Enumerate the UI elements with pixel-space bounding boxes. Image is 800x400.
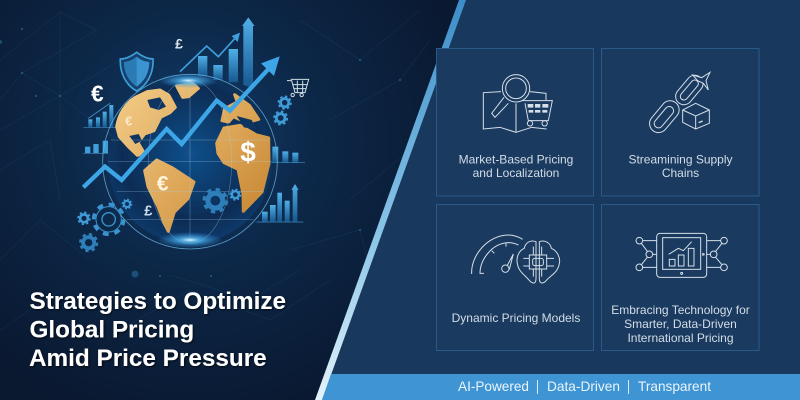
panel: embracing technology: Smarter, Data-Driven — [624, 317, 737, 331]
icon: shopping cart — [287, 79, 309, 97]
back upper bar chart with arrow — [180, 17, 255, 88]
glow flares — [157, 73, 223, 248]
label: Dynamic Pricing Models — [452, 311, 580, 325]
title — [29, 288, 286, 372]
diagonal accent stripe — [315, 0, 466, 400]
icon: chain, plane and box — [646, 72, 710, 136]
currency symbols: £ — [175, 35, 183, 51]
title: Amid Price Pressure — [29, 345, 267, 372]
currency symbols: € — [91, 81, 104, 107]
label: Streamining Supply — [628, 152, 733, 166]
right bar charts — [257, 147, 305, 222]
label: Market-Based Pricing — [459, 152, 573, 166]
left background panel — [0, 0, 480, 400]
icon: tablet with chart and nodes — [636, 233, 727, 277]
icon: map, magnifier and cart — [483, 75, 552, 132]
right panel background — [316, 0, 800, 400]
icon: shield — [120, 52, 153, 91]
bottom banner — [322, 374, 800, 400]
panel: embracing technology — [602, 204, 759, 350]
globe — [103, 74, 277, 249]
bottom banner: Data-Driven — [547, 378, 620, 394]
label: Embracing Technology for — [611, 303, 750, 317]
gears — [78, 97, 291, 251]
bottom banner: Transparent — [638, 378, 711, 394]
currency symbols — [91, 35, 256, 220]
continents — [117, 83, 269, 231]
panel: market-based pricing: and Localization — [473, 166, 559, 180]
icon: gauge and AI brain — [472, 235, 560, 283]
main rising arrow — [83, 56, 280, 187]
currency symbols: € — [157, 171, 169, 195]
coastline details — [129, 97, 257, 144]
banner text: AI-Powered — [458, 378, 529, 394]
global pricing illustration — [78, 17, 309, 251]
panel: supply chains: Chains — [662, 166, 699, 180]
panel: dynamic pricing — [436, 204, 594, 350]
panel: supply chains — [602, 48, 759, 196]
currency symbols: € — [125, 115, 132, 129]
title: Global Pricing — [30, 316, 194, 344]
panel: market-based pricing — [436, 48, 594, 196]
panel: embracing technology: International Pricing — [627, 331, 734, 345]
currency symbols: £ — [144, 204, 152, 220]
left bar charts — [83, 103, 120, 153]
currency symbols: $ — [240, 137, 256, 168]
title: Strategies to Optimize — [30, 288, 286, 315]
